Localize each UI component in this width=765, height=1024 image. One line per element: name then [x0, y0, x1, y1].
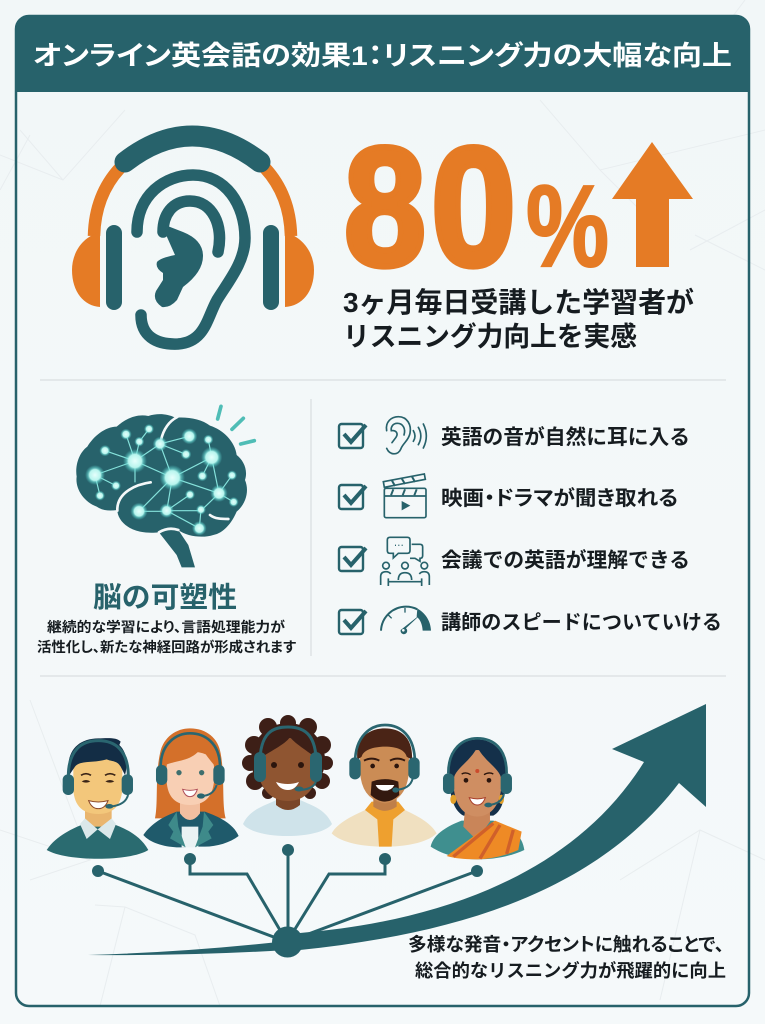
- item: meeting English: 会議での英語が理解できる: [441, 548, 690, 572]
- text: brain plasticity description: [37, 619, 297, 655]
- text: diverse accents message: [408, 934, 726, 981]
- icon: ear with headphones: [72, 136, 314, 344]
- text: brain plasticity description: 活性化し、新たな神経回路が形成されます: [37, 639, 297, 655]
- person: instructor 2: [143, 728, 239, 847]
- item: meeting English: [339, 537, 690, 586]
- item: teacher speed: 講師のスピードについていける: [441, 611, 722, 634]
- arrow: up: [612, 142, 693, 267]
- statistic caption: リスニング力向上を実感: [343, 321, 637, 352]
- item: movies and dramas: 映画・ドラマが聞き取れる: [441, 486, 678, 510]
- statistic: 80%: 0: [431, 112, 516, 301]
- statistic: 80%: 8: [344, 112, 426, 301]
- icon: brain with neural network: [76, 406, 254, 567]
- person: instructor 3: [242, 715, 333, 836]
- title: オンライン英会話の効果1：リスニング力の大幅な向上: [33, 40, 732, 71]
- statistic: 80%: [344, 112, 609, 301]
- person: instructor 4: [332, 725, 437, 847]
- person: instructor 5: [431, 738, 524, 859]
- instructor network lines: [92, 844, 483, 958]
- item: movies and dramas: [339, 474, 678, 518]
- text: diverse accents message: 総合的なリスニング力が飛躍的に向上: [415, 960, 726, 981]
- header banner: [16, 16, 749, 92]
- statistic caption: 3ヶ月毎日受講した学習者が: [343, 286, 694, 318]
- statistic caption: [343, 286, 694, 352]
- item: natural hearing: 英語の音が自然に耳に入る: [441, 425, 690, 449]
- statistic: 80%: %: [526, 161, 609, 291]
- text: diverse accents message: 多様な発音・アクセントに触れることで、: [408, 934, 724, 955]
- heading: brain plasticity: 脳の可塑性: [93, 582, 237, 614]
- text: brain plasticity description: 継続的な学習により、言語処理能力が: [47, 619, 285, 635]
- item: natural hearing: [339, 417, 690, 454]
- checklist: [339, 417, 722, 634]
- item: teacher speed: [339, 607, 722, 634]
- arrow: growth swoosh: [88, 704, 706, 955]
- person: instructor 1: [47, 738, 148, 859]
